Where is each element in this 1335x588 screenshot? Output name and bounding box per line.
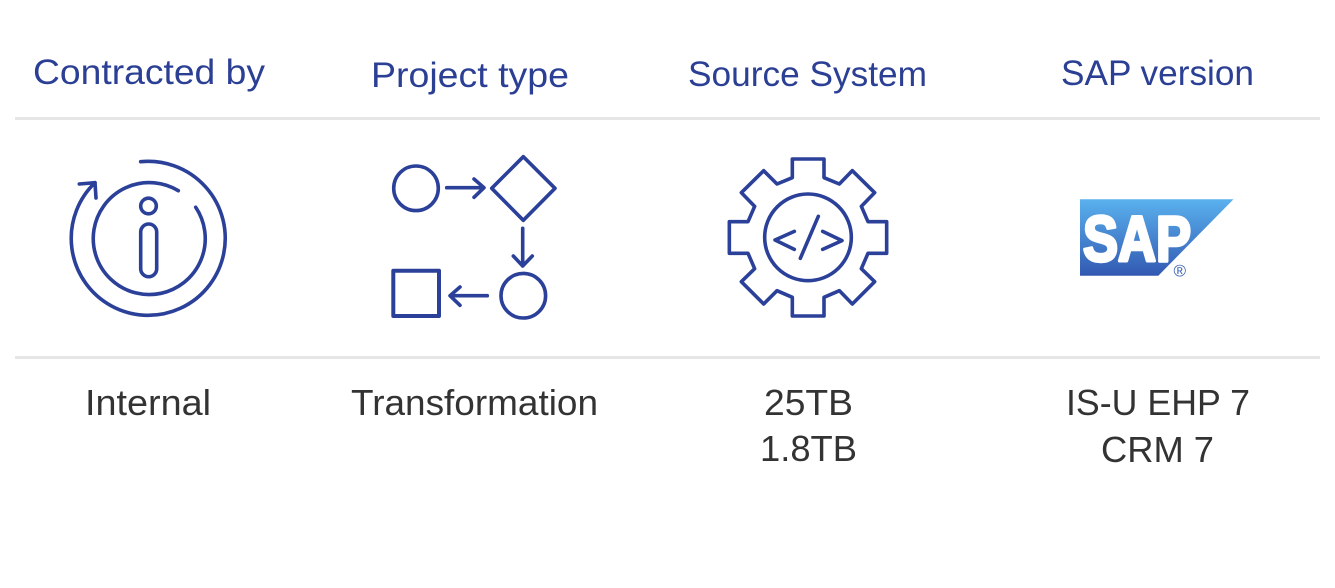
value: source sizes: 25TB [764,382,853,423]
value: SAP versions: CRM 7 [1101,429,1214,470]
value: source sizes: 1.8TB [760,428,857,469]
icon: process flow [393,157,555,318]
value: SAP versions: IS-U EHP 7 [1066,382,1250,423]
icon: SAP logo: ® [1174,262,1186,280]
value: Transformation: Transformation [351,382,598,423]
value: source sizes [760,382,857,469]
icon: SAP logo: SAP [1083,203,1191,275]
heading: Project type: Project type [371,56,569,95]
heading: Source System: Source System [688,55,927,94]
heading: SAP version: SAP version [1061,54,1254,93]
icon: gear with code symbol [729,159,887,316]
value: Internal: Internal [85,382,211,423]
value: SAP versions [1066,382,1250,470]
icon: information with circular arrow [71,161,225,315]
heading: Contracted by: Contracted by [33,53,266,92]
